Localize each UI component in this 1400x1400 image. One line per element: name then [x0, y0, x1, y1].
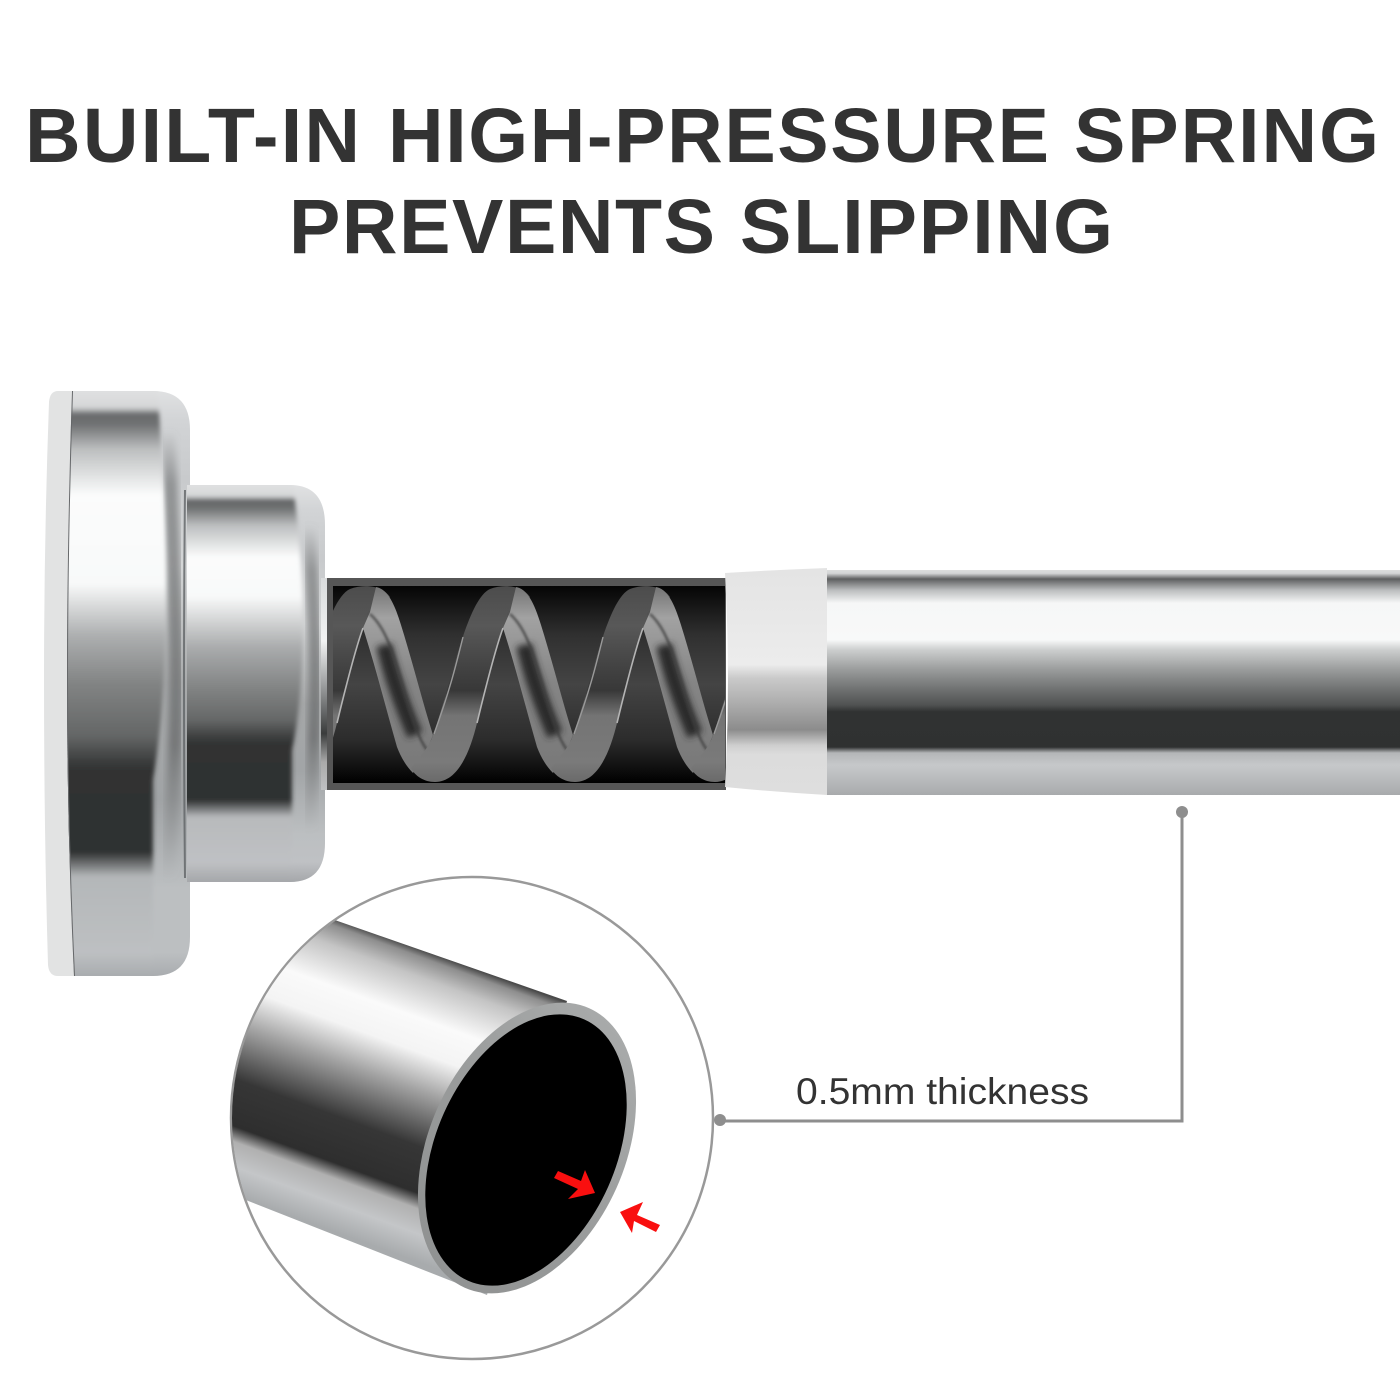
magnified tube detail — [200, 873, 713, 1359]
white sleeve — [725, 568, 827, 795]
disc and collar seam — [184, 490, 185, 878]
chrome end cap — [44, 383, 325, 985]
tube opening — [386, 983, 666, 1317]
window background — [333, 586, 725, 783]
tube body — [232, 920, 567, 1295]
title: PREVENTS — [289, 184, 715, 270]
window frame — [327, 578, 726, 790]
outer red arrow — [620, 1202, 660, 1233]
title — [25, 93, 1379, 270]
inner red arrow — [554, 1170, 595, 1199]
callout leader line — [714, 806, 1188, 1126]
spring coil — [333, 586, 725, 782]
title: HIGH-PRESSURE — [388, 93, 1049, 179]
title: BUILT-IN — [25, 93, 360, 179]
small chrome collar — [180, 477, 325, 892]
thickness label: 0.5mm thickness — [796, 1071, 1089, 1112]
lens circle — [231, 877, 713, 1359]
white wall pad — [44, 391, 74, 976]
title: SLIPPING — [740, 184, 1113, 270]
chrome rod — [827, 570, 1400, 795]
spring window — [321, 578, 726, 790]
tube rim — [375, 968, 679, 1328]
title: SPRING — [1074, 93, 1379, 179]
large chrome disc — [60, 383, 190, 985]
chrome ring — [321, 578, 329, 790]
